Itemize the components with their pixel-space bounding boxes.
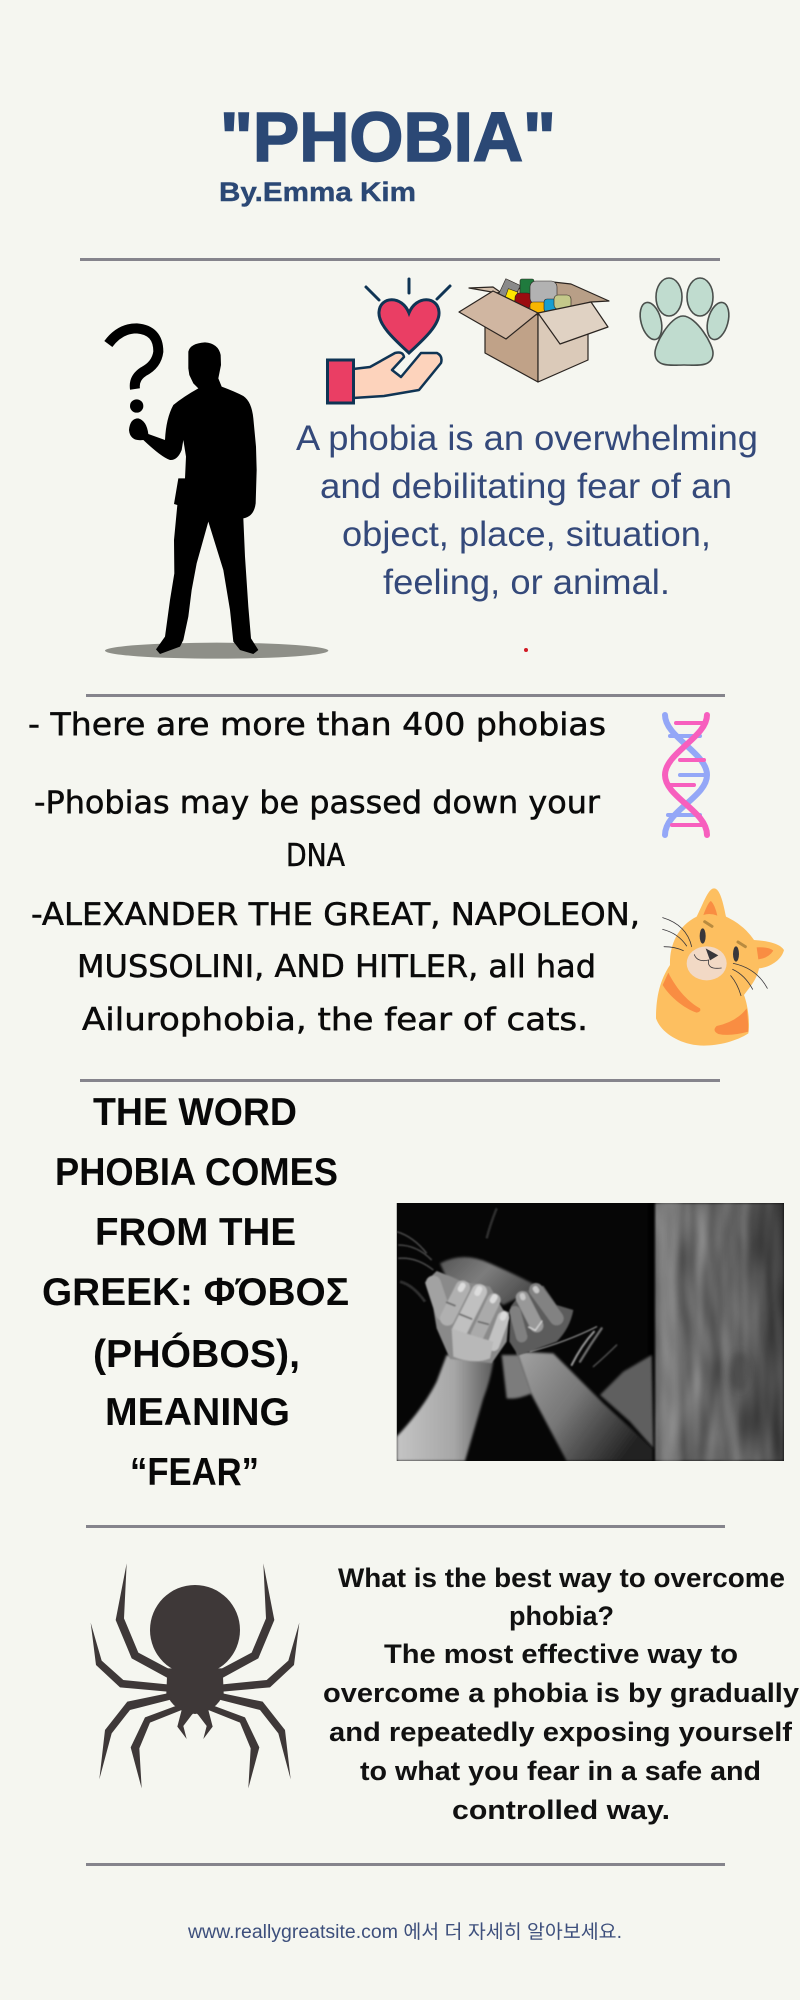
hair strands over arm <box>530 1327 617 1367</box>
hair <box>397 1208 497 1302</box>
facts text: -Phobias may be passed down your <box>34 785 600 821</box>
icon: paw print <box>636 278 733 365</box>
spider body <box>150 1585 240 1714</box>
box contents <box>496 279 571 313</box>
heart <box>379 300 439 353</box>
question mark <box>108 328 158 413</box>
overcoming phobia text: overcome a phobia is by gradually <box>323 1678 799 1708</box>
man silhouette <box>129 342 258 654</box>
overcoming phobia text: to what you fear in a safe and <box>360 1756 761 1786</box>
overcoming phobia text: controlled way. <box>452 1795 670 1825</box>
word origin text: PHOBIA COMES <box>55 1151 338 1194</box>
overcoming phobia text <box>323 1563 799 1825</box>
facts text <box>28 707 640 1038</box>
right hand <box>509 1286 573 1356</box>
overcoming phobia text: What is the best way to overcome <box>338 1563 785 1593</box>
overcoming phobia text: phobia? <box>509 1601 614 1631</box>
facts text: MUSSOLINI, AND HITLER, all had <box>77 949 596 985</box>
hand <box>353 352 442 398</box>
word origin text: FROM THE <box>95 1211 296 1254</box>
shoulder and chest <box>502 1355 653 1448</box>
definition text: A phobia is an overwhelming <box>296 419 758 458</box>
icon: cat <box>656 888 784 1046</box>
definition text: feeling, or animal. <box>383 563 670 602</box>
forehead <box>440 1257 537 1305</box>
rays <box>366 279 450 300</box>
definition text: object, place, situation, <box>342 515 711 554</box>
word origin text <box>42 1091 349 1494</box>
definition text <box>296 419 758 602</box>
icon: man with question mark <box>105 328 328 659</box>
overcoming phobia text: The most effective way to <box>384 1639 738 1669</box>
right legs <box>195 1563 299 1788</box>
left hand <box>425 1271 509 1363</box>
sleeve <box>328 360 354 403</box>
word origin text: THE WORD <box>93 1091 297 1134</box>
photo: woman covering her face <box>397 1198 784 1465</box>
title: "PHOBIA" <box>220 98 556 176</box>
blurred wall <box>648 1198 784 1465</box>
footer: www.reallygreatsite.com 에서 더 자세히 알아보세요. <box>187 1921 622 1943</box>
icon: heart in hand <box>328 279 450 403</box>
word origin text: MEANING <box>105 1391 290 1434</box>
right forearm <box>517 1352 653 1461</box>
word origin text: (PHÓBOS), <box>93 1332 300 1376</box>
facts text: Ailurophobia, the fear of cats. <box>82 1002 588 1038</box>
definition text: and debilitating fear of an <box>320 467 732 506</box>
ground shadow <box>105 643 328 659</box>
word origin text: GREEK: ΦΌΒΟΣ <box>42 1271 349 1314</box>
word origin text: “FEAR” <box>130 1451 259 1494</box>
icon: open box <box>459 279 609 382</box>
overcoming phobia text: and repeatedly exposing yourself <box>329 1717 793 1747</box>
icon: spider <box>91 1563 299 1788</box>
byline: By.Emma Kim <box>219 177 416 207</box>
left forearm <box>397 1355 493 1461</box>
facts text: DNA <box>286 838 345 874</box>
facts text: -ALEXANDER THE GREAT, NAPOLEON, <box>31 897 640 933</box>
left legs <box>91 1563 195 1788</box>
icon: DNA helix <box>665 715 707 835</box>
facts text: - There are more than 400 phobias <box>28 707 606 743</box>
